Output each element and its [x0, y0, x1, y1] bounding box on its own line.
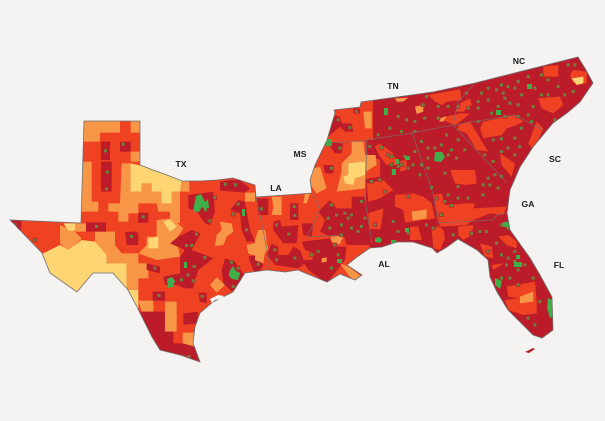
coastline outline — [10, 57, 593, 362]
state borders — [256, 83, 543, 270]
state labels: FL — [554, 260, 564, 270]
base fill: bright red counties — [16, 100, 373, 344]
eastern dark red base — [366, 58, 592, 338]
Alabama, Georgia and Florida counties — [367, 170, 537, 315]
state labels: AL — [378, 259, 390, 269]
central Texas counties — [130, 180, 268, 301]
Louisiana and Mississippi counties — [255, 108, 377, 283]
map body — [9, 56, 594, 362]
state labels: MS — [294, 149, 307, 159]
choropleth map of southern states — [9, 56, 594, 362]
state labels: SC — [549, 154, 561, 164]
state labels: NC — [513, 56, 525, 66]
state labels: GA — [522, 199, 534, 209]
state labels: TX — [176, 159, 187, 169]
state labels — [176, 56, 564, 270]
western Texas counties — [7, 117, 207, 367]
state labels: TN — [387, 81, 399, 91]
county seat dots — [310, 63, 576, 326]
Tennessee and Carolinas counties — [360, 65, 587, 180]
state labels: LA — [270, 183, 282, 193]
urban green counties — [167, 84, 554, 318]
Gulf bays and Keys — [210, 274, 535, 353]
